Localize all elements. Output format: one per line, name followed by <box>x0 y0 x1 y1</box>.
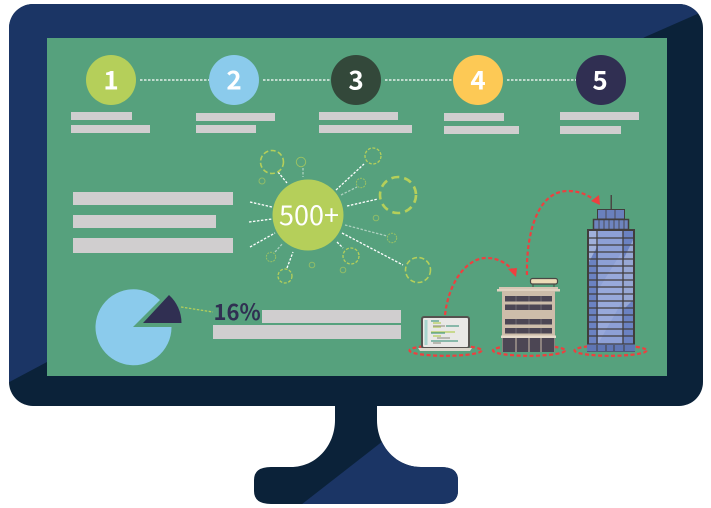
icon: skyscraper <box>587 195 635 352</box>
step connector lines <box>140 79 576 81</box>
left text placeholders <box>73 192 233 253</box>
step 4: 4 <box>470 60 486 98</box>
pie leader line <box>181 307 213 312</box>
center circle <box>272 180 344 250</box>
percentage label: 16% <box>214 295 261 327</box>
radial diagram: 500+ <box>249 148 430 283</box>
step 3 <box>331 55 381 105</box>
pie text placeholders <box>213 310 401 339</box>
center label: 500+ <box>279 194 339 233</box>
monitor stand <box>254 406 458 504</box>
step 1 <box>86 55 136 105</box>
monitor body <box>0 4 711 406</box>
step 4 <box>453 55 503 105</box>
step 5 <box>576 55 626 105</box>
step 3: 3 <box>348 60 364 98</box>
screen <box>47 38 667 376</box>
small rings <box>259 148 430 283</box>
pie chart <box>96 289 182 365</box>
step 5: 5 <box>592 60 608 98</box>
step 2 <box>209 55 259 105</box>
icon: mid-rise building <box>497 278 560 352</box>
icon: laptop <box>418 317 472 351</box>
red dashed arrows <box>445 191 593 315</box>
step 1: 1 <box>103 60 119 98</box>
step 2: 2 <box>226 60 242 98</box>
red dashed ellipses <box>410 345 646 356</box>
arrowheads <box>508 195 600 277</box>
spokes <box>249 164 403 268</box>
step text placeholders <box>71 112 639 134</box>
